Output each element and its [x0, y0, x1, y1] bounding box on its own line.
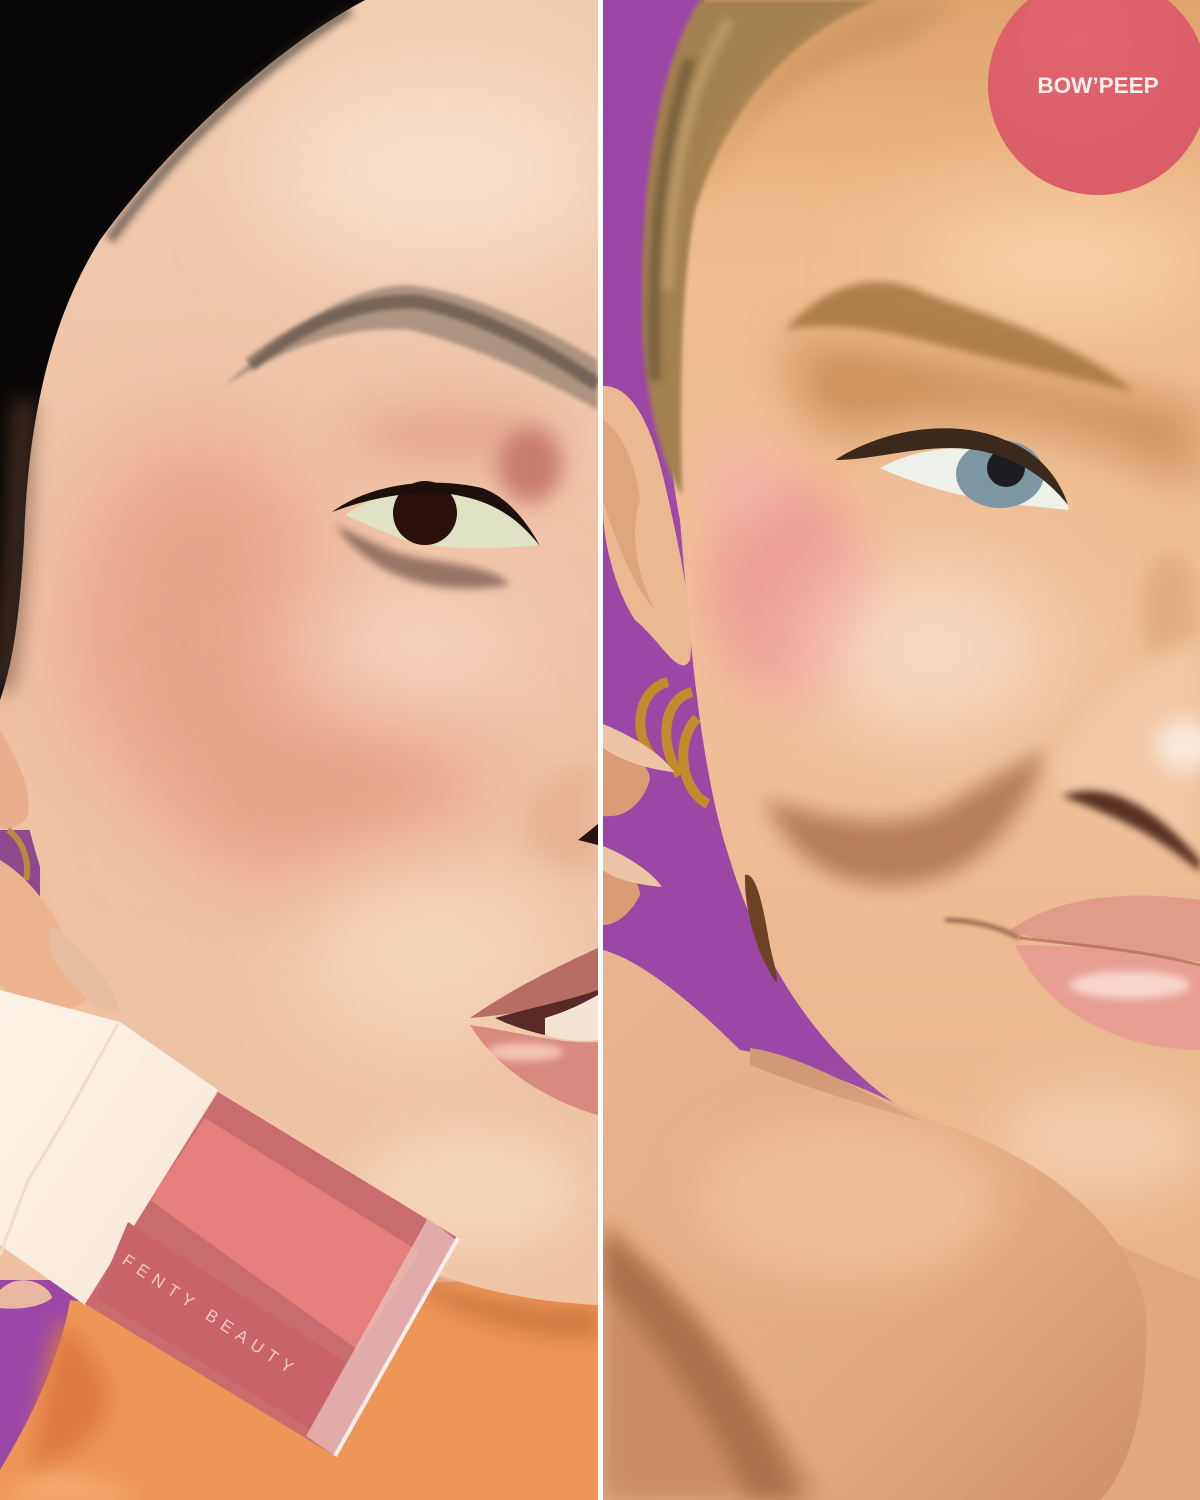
hair [0, 0, 365, 700]
neck behind hand [1080, 1240, 1200, 1500]
ear [0, 730, 29, 829]
eye [835, 428, 1068, 510]
face skin [8, 0, 598, 1305]
under-cheek fold shadow [765, 750, 1050, 886]
blush [710, 480, 870, 700]
panel: left portrait [0, 0, 610, 1500]
chin/jaw shading [990, 1080, 1200, 1200]
earrings [640, 682, 708, 804]
lower face highlight [300, 860, 560, 1040]
eyebrow [785, 282, 1135, 392]
swatch label: BOW’PEEP [1037, 73, 1159, 98]
hair [642, 0, 960, 495]
eye socket tan [790, 340, 1200, 490]
color swatch: Bow'Peep [988, 0, 1200, 195]
purple backdrop left [0, 1280, 80, 1470]
cheek highlight [810, 570, 1050, 730]
cheek highlight [290, 600, 530, 700]
forehead light [910, 210, 1200, 310]
nose shadow [523, 760, 598, 871]
jaw highlight [360, 1130, 580, 1250]
liquid top face [150, 1118, 420, 1350]
side-of-face dark crease [745, 875, 777, 982]
fingers [0, 860, 92, 1011]
wrist shadow [603, 1220, 820, 1500]
bottle cap [0, 990, 218, 1305]
purple backdrop [603, 0, 1200, 1500]
glass edge [306, 1218, 456, 1456]
brand text: FENTY BEAUTY [119, 1250, 302, 1381]
lips [945, 895, 1200, 1050]
neck right of hand [1110, 1280, 1200, 1500]
eyeshadow [340, 405, 560, 465]
panel: right portrait [603, 0, 1200, 1500]
eyebrow [225, 285, 598, 410]
liquid front face [96, 1222, 345, 1430]
face skin [664, 0, 1200, 1280]
freckles [1140, 550, 1200, 670]
eye [332, 481, 540, 589]
upper nails and fingers [603, 738, 650, 816]
lips [470, 948, 598, 1115]
ear [603, 386, 691, 665]
glass body [85, 1092, 458, 1456]
forehead highlight [270, 80, 610, 260]
orange turtleneck [0, 1279, 598, 1500]
nose [1048, 640, 1200, 850]
product bottle [0, 990, 458, 1456]
blush on cheek [70, 430, 330, 810]
hand [603, 950, 1147, 1500]
